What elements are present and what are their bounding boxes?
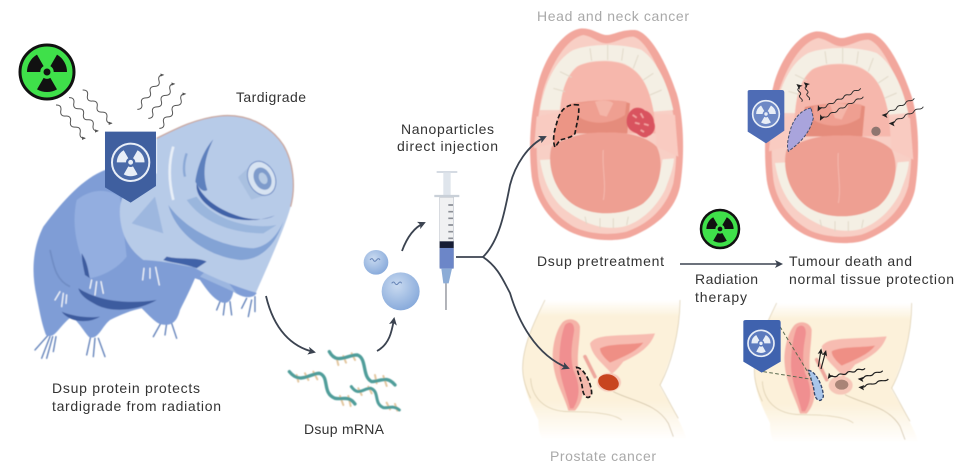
nanoparticles — [364, 250, 420, 310]
syringe — [434, 172, 459, 310]
label: Dsup protein protects tardigrade: Dsup protein protects — [52, 380, 200, 396]
label: nanoparticles direct injection: direct injection — [397, 138, 498, 154]
label: tumour death and normal tissue protection: normal tissue protection — [789, 271, 954, 287]
radiation hazard icon — [20, 45, 74, 99]
label: prostate cancer: Prostate cancer — [550, 448, 656, 464]
label: Dsup mRNA: Dsup mRNA — [304, 421, 385, 437]
rear dark folds — [78, 288, 157, 310]
illustration: pelvis before treatment — [523, 300, 687, 440]
label: tumour death and normal tissue protection: Tumour death and — [789, 253, 912, 269]
illustration: tardigrade — [33, 116, 293, 358]
dashed injection site — [554, 105, 579, 147]
protected tissue patch — [788, 108, 813, 151]
radiation arrows: mouth — [798, 83, 923, 123]
arrow: syringe to prostate cancer — [483, 257, 568, 368]
illustration: pelvis after treatment — [754, 303, 918, 443]
arrow: radiation therapy — [680, 263, 781, 265]
shield icon on tardigrade — [105, 132, 156, 203]
label: Dsup pretreatment: Dsup pretreatment — [537, 253, 664, 269]
arrow: tardigrade to mRNA — [266, 296, 314, 352]
illustration: mouth after treatment — [765, 31, 918, 243]
label: radiation therapy: Radiation — [695, 271, 758, 287]
label: head and neck cancer: Head and neck cancer — [537, 8, 689, 24]
front claws — [55, 267, 159, 307]
dashed injection site — [577, 367, 592, 397]
tumour — [598, 374, 619, 391]
front body and head — [120, 116, 293, 293]
radiation therapy icon — [701, 210, 739, 248]
illustration: mouth before treatment — [530, 28, 683, 240]
protected tissue patch — [808, 370, 823, 400]
dashed lines from shield to tissue — [763, 327, 812, 379]
rear claws — [35, 297, 255, 358]
arrow: syringe to head and neck cancer — [483, 137, 545, 257]
incoming and deflected radiation waves — [56, 75, 185, 138]
radiation arrows: pelvis — [818, 350, 888, 387]
mouth tube — [235, 157, 281, 203]
label: Dsup protein protects tardigrade: tardigrade from radiation — [52, 398, 221, 414]
DNA strands: Dsup mRNA — [289, 352, 399, 411]
body fold bands — [168, 205, 283, 260]
tumour — [627, 108, 655, 137]
label: tardigrade: Tardigrade — [236, 89, 306, 105]
arrow: nanoparticles to syringe — [402, 223, 424, 251]
shield icon: pelvis — [743, 320, 781, 373]
residual tumour — [871, 127, 881, 136]
rear body — [33, 170, 257, 338]
arrow: mRNA to nanoparticles — [377, 319, 394, 351]
label: nanoparticles direct injection: Nanoparticles — [401, 121, 494, 137]
branching connector from syringe — [456, 256, 483, 258]
label: radiation therapy: therapy — [695, 289, 747, 305]
shield icon: mouth — [748, 90, 784, 143]
residual tumour — [835, 380, 848, 390]
